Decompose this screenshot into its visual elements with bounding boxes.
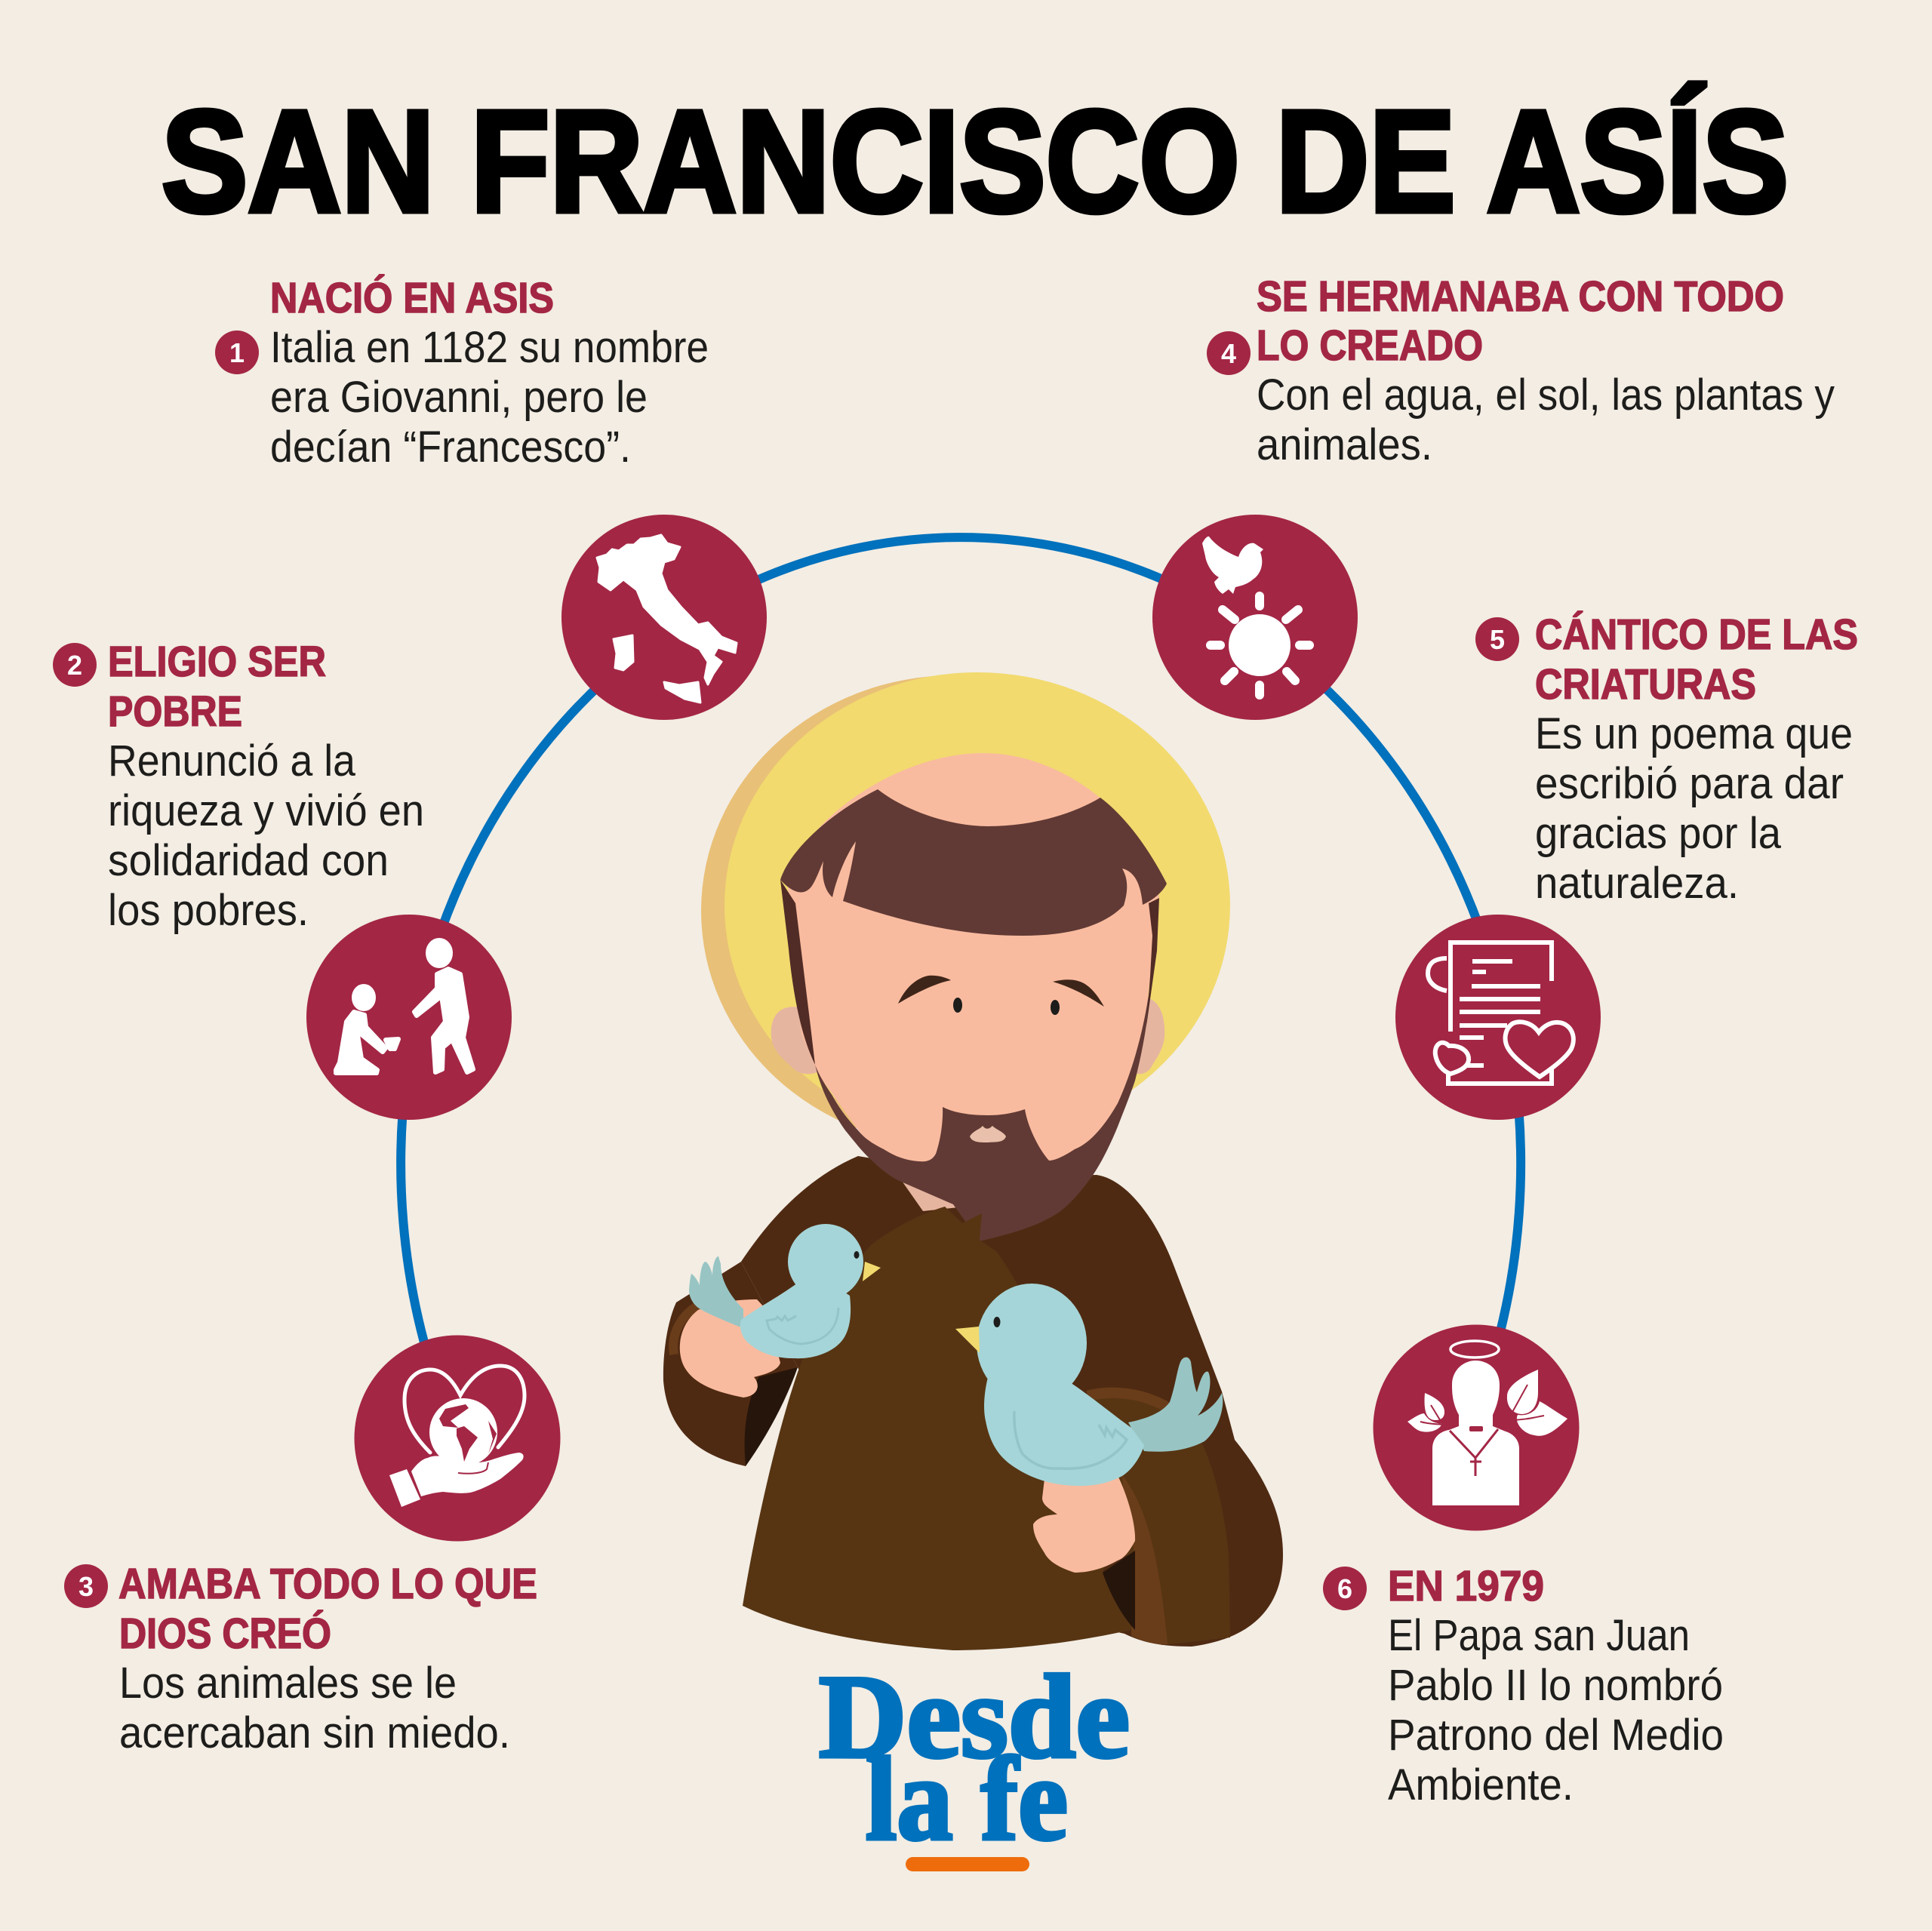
icon: globe [429, 1398, 497, 1466]
body 1: era Giovanni, pero le [270, 373, 648, 422]
badge 2 [53, 643, 97, 687]
ears [771, 998, 1164, 1074]
body 1 [270, 323, 709, 472]
body 1: decían “Francesco”. [270, 423, 631, 472]
icon circle: Italy map [561, 515, 767, 720]
body 2: los pobres. [108, 886, 309, 935]
icon: bust [1432, 1361, 1519, 1505]
wing [1014, 1411, 1127, 1468]
hair [780, 789, 1167, 936]
icon circle: patron saint of the environment [1374, 1325, 1579, 1530]
tail [689, 1256, 743, 1327]
beak [863, 1262, 881, 1281]
heading 5: CÁNTICO DE LAS [1535, 610, 1858, 659]
icon: leaves [1407, 1370, 1567, 1436]
icon: two people with bowl [336, 940, 473, 1073]
icon: Italy mainland and islands [597, 535, 737, 703]
body 6 [1388, 1611, 1724, 1810]
right bird [955, 1284, 1223, 1486]
heading 3 [118, 1560, 537, 1658]
right sleeve panel [1088, 1387, 1230, 1645]
icon circle: giving to the poor [306, 915, 512, 1120]
icon: heart outline [405, 1366, 525, 1453]
eyebrows [898, 976, 1104, 1007]
icon: sun [1211, 596, 1309, 695]
body 6: El Papa san Juan [1388, 1611, 1690, 1660]
robe: front [743, 1207, 1135, 1650]
logo underline [906, 1857, 1029, 1871]
badge 3: 3 [78, 1571, 94, 1602]
illustration: saint with birds [663, 672, 1283, 1650]
body 5: Es un poema que [1535, 709, 1853, 758]
tail [1128, 1358, 1223, 1452]
wing [767, 1308, 838, 1344]
body 3 [119, 1659, 510, 1757]
text block 6: En 1979 [1323, 1562, 1724, 1810]
left hand [680, 1299, 780, 1398]
mouth [970, 1126, 1006, 1142]
body [740, 1283, 851, 1358]
badge 2: 2 [67, 650, 82, 681]
heading 6: EN 1979 [1388, 1562, 1544, 1610]
neck [902, 1181, 958, 1211]
heading 2: ELIGIO SER [108, 638, 326, 686]
body 6: Ambiente. [1388, 1760, 1574, 1810]
body 2: Renunció a la [108, 736, 356, 786]
text block 3: Amaba todo lo que Dios creó [64, 1560, 537, 1757]
heading 2: POBRE [108, 687, 242, 736]
eyes [953, 998, 1060, 1015]
heading 3: AMABA TODO LO QUE [118, 1560, 537, 1608]
logo: Desde la fe: Desde [819, 1651, 1130, 1783]
badge 1 [215, 331, 259, 374]
heading 5: CRIATURAS [1535, 660, 1756, 709]
right sideburn [1146, 898, 1159, 1026]
badge 6 [1323, 1567, 1367, 1610]
sleeve interiors [745, 1367, 1135, 1630]
badge 5: 5 [1490, 624, 1505, 655]
text block 5: Cántico de las criaturas [1475, 610, 1858, 908]
icon: hand [389, 1453, 524, 1507]
text block 4: Se hermanaba con todo lo creado [1207, 272, 1835, 469]
body 5: gracias por la [1535, 809, 1782, 858]
body 2: solidaridad con [108, 836, 389, 885]
heading 4 [1257, 272, 1784, 370]
badge 1: 1 [229, 337, 245, 368]
heading 5 [1535, 610, 1858, 709]
head [780, 753, 1167, 1241]
face skin [788, 753, 1159, 1207]
beard [815, 976, 1151, 1241]
body [984, 1358, 1144, 1486]
badge 5 [1475, 617, 1519, 661]
body 2: riqueza y vivió en [108, 786, 424, 835]
badge 4: 4 [1221, 338, 1236, 369]
right hand [1033, 1475, 1135, 1573]
body 6: Pablo II lo nombró [1388, 1661, 1723, 1710]
heading 4: LO CREADO [1257, 321, 1483, 370]
blue arc connecting the circles [401, 537, 1521, 1351]
text block 1: Nació en Asis [215, 274, 709, 472]
head [788, 1224, 863, 1299]
logo: Desde la fe: la fe [866, 1733, 1068, 1865]
heading 3: DIOS CREÓ [119, 1610, 331, 1658]
icon: dove [1202, 537, 1263, 594]
badge 6: 6 [1337, 1573, 1352, 1604]
body 3: Los animales se le [119, 1659, 457, 1708]
icon: halo ring [1451, 1341, 1499, 1358]
icon: necklace and cross [1450, 1429, 1498, 1476]
body 4: animales. [1257, 420, 1432, 469]
body 5: naturaleza. [1535, 859, 1739, 908]
icon: document with hearts [1428, 942, 1574, 1084]
eye [854, 1251, 859, 1259]
body 2 [108, 736, 424, 935]
eye [993, 1317, 1001, 1327]
icon circle: world in hand with heart [355, 1336, 560, 1541]
heading 1: NACIÓ EN ASIS [270, 274, 554, 322]
body 4: Con el agua, el sol, las plantas y [1257, 371, 1835, 420]
head [977, 1284, 1087, 1403]
body 5: escribió para dar [1535, 759, 1844, 808]
badge 3 [64, 1564, 108, 1608]
badge 4 [1207, 331, 1251, 375]
icon: collar [1469, 1426, 1483, 1431]
title: SAN FRANCISCO DE ASÍS [162, 80, 1789, 242]
left bird [689, 1224, 881, 1358]
icon circle: dove and sun [1152, 515, 1358, 720]
text block 2: Eligio ser pobre [53, 638, 424, 935]
body 3: acercaban sin miedo. [119, 1708, 510, 1757]
halo [701, 672, 1230, 1146]
beak [955, 1327, 980, 1353]
body 4 [1257, 371, 1835, 469]
robe: left sleeve [663, 1262, 798, 1466]
icon circle: canticle document with hearts [1395, 915, 1601, 1120]
body 5 [1535, 709, 1853, 908]
body 6: Patrono del Medio [1388, 1711, 1724, 1760]
heading 2 [108, 638, 326, 736]
robe: shoulders and right sleeve [741, 1156, 1283, 1647]
left sideburn [780, 880, 815, 1065]
logo: Desde la fe [819, 1651, 1130, 1865]
heading 4: SE HERMANABA CON TODO [1257, 272, 1784, 321]
body 1: Italia en 1182 su nombre [270, 323, 709, 372]
sleeve bands [673, 1305, 1186, 1644]
